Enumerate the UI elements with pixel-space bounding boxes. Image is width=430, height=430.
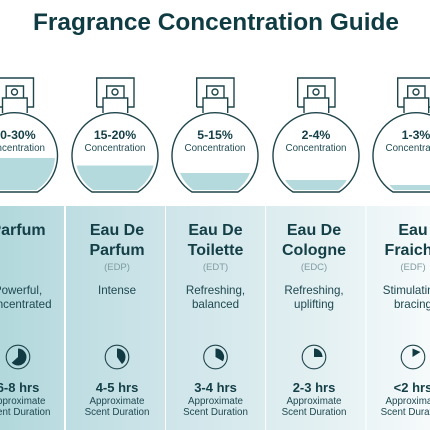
icon: clock 3-4 hrs xyxy=(204,345,227,369)
panel: Eau De Parfum: 4-5 hrs xyxy=(96,380,138,395)
bottle: Eau De Cologne: 2-4% xyxy=(302,128,330,142)
icon: clock 6-8 hrs xyxy=(6,345,30,369)
panel: Eau De Toilette: Approximate xyxy=(188,396,244,407)
panel: Eau De Toilette: (EDT) xyxy=(203,262,228,273)
panel: Eau De Cologne: (EDC) xyxy=(301,262,327,273)
bottle: Parfum xyxy=(0,78,58,192)
panel: Eau De Parfum: Approximate xyxy=(90,396,145,407)
panel: Eau Fraiche: (EDF) xyxy=(400,262,426,273)
panel: Eau De Parfum: Eau De xyxy=(90,222,144,239)
panel: Eau De Toilette xyxy=(183,222,248,418)
panel: Eau De Toilette: Refreshing, xyxy=(186,284,245,297)
panel: Eau De Cologne: Eau De xyxy=(287,222,341,239)
icon: clock 2-3 hrs xyxy=(302,345,326,369)
bottle: Eau De Parfum xyxy=(72,78,158,192)
panel: Eau De Toilette: Toilette xyxy=(188,242,243,259)
panel: Eau Fraiche xyxy=(381,222,430,418)
panel: Eau De Cologne: Refreshing, xyxy=(284,284,344,297)
panels background xyxy=(0,206,430,430)
panel: Eau Fraiche: Eau xyxy=(398,222,428,239)
bottle: Eau De Cologne: Concentration xyxy=(286,143,346,154)
bottle: Eau De Toilette xyxy=(172,78,258,192)
panel: Eau De Toilette: balanced xyxy=(192,298,239,311)
icon: clock 4-5 hrs xyxy=(105,345,129,369)
bottle: Eau De Parfum: Concentration xyxy=(84,143,146,154)
icon: clock under 2 hrs xyxy=(401,345,425,369)
panel: Eau De Cologne: 2-3 hrs xyxy=(293,380,335,395)
panel: Eau De Cologne: Approximate xyxy=(286,396,342,407)
panel: Eau De Toilette: Scent Duration xyxy=(183,407,248,418)
panel: Eau De Parfum: Scent Duration xyxy=(85,407,149,418)
bottle: Eau De Toilette: 5-15% xyxy=(197,128,233,142)
bottle: Eau Fraiche: 1-3% xyxy=(402,128,430,142)
panel: Eau De Parfum xyxy=(85,222,149,418)
panel: Eau De Cologne: uplifting xyxy=(294,298,334,311)
panel: Parfum xyxy=(0,222,52,418)
panel: Eau De Cologne xyxy=(282,222,346,418)
bottle: Eau De Cologne xyxy=(273,78,359,192)
panel: Eau De Parfum: (EDP) xyxy=(104,262,130,273)
bottle: Eau De Toilette: Concentration xyxy=(184,143,246,154)
bottle: Eau Fraiche xyxy=(373,78,430,192)
panel: Eau De Toilette: Eau De xyxy=(188,222,243,239)
bottle: Eau De Parfum: 15-20% xyxy=(94,128,136,142)
panel: Eau De Toilette: 3-4 hrs xyxy=(194,380,237,395)
title: Fragrance Concentration Guide xyxy=(33,9,399,36)
panel: Eau De Cologne: Scent Duration xyxy=(282,407,346,418)
panel: Eau De Parfum: Intense xyxy=(98,284,136,297)
panel: Eau De Parfum: Parfum xyxy=(89,242,145,259)
panel: Eau De Cologne: Cologne xyxy=(282,242,346,259)
